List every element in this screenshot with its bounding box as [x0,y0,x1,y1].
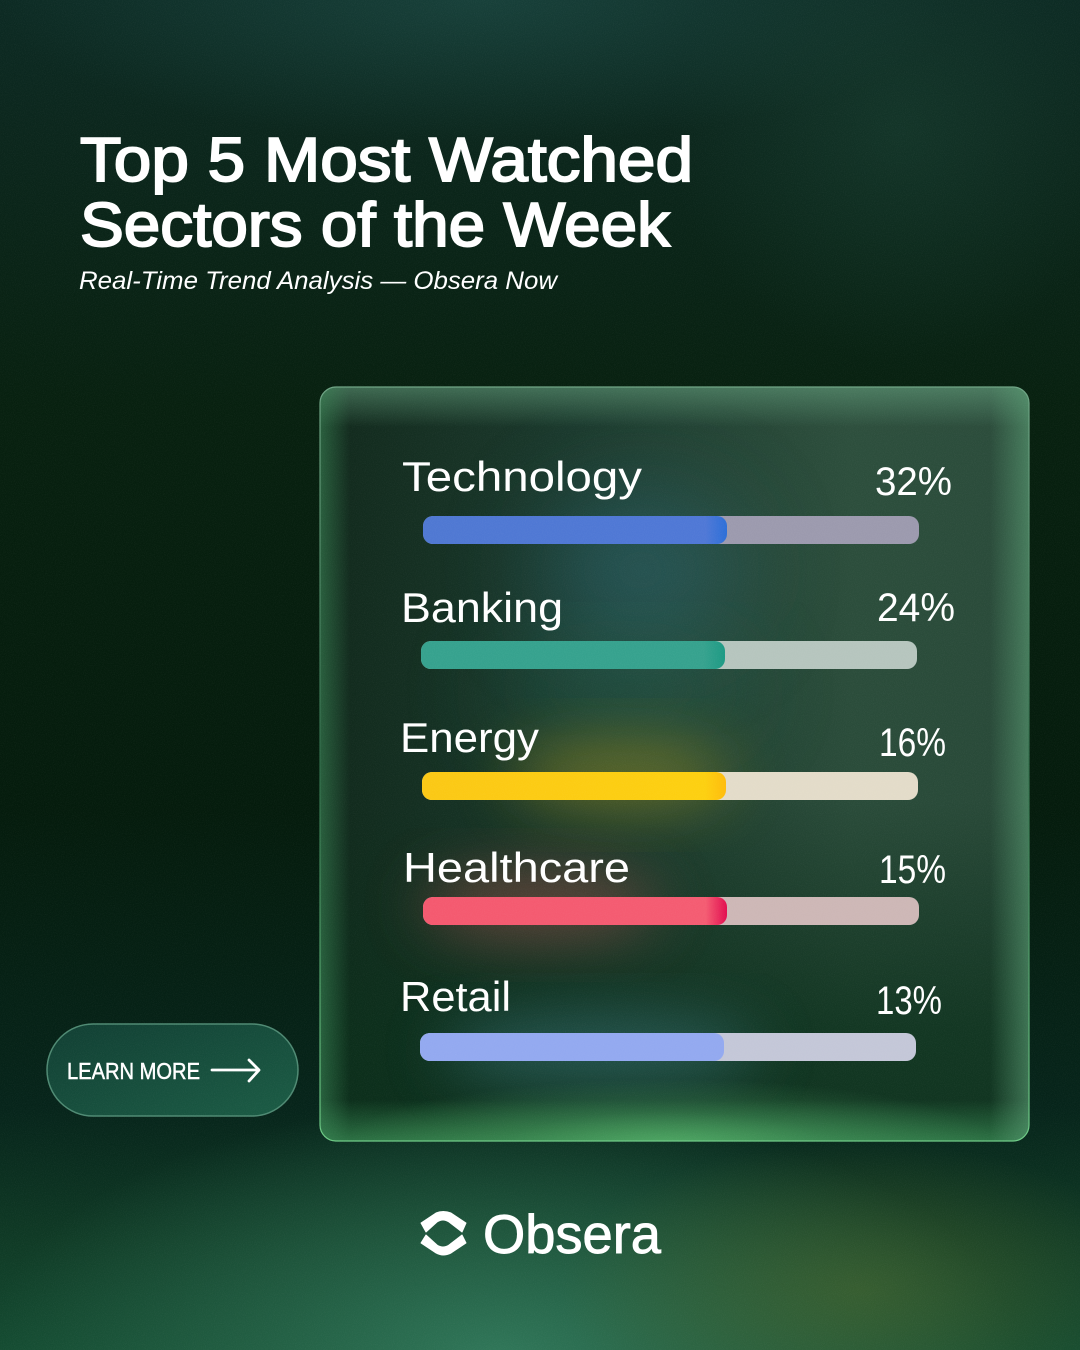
row: Healthcare 15%: 15% [879,848,946,892]
subtitle: Real-Time Trend Analysis — Obsera Now [79,267,559,295]
row: Technology 32%: Technology [402,453,642,500]
row: Energy 16% [400,714,946,800]
button: learn more [47,1024,298,1116]
panel glass background [320,387,1029,1141]
icon: chevrons [421,1212,466,1255]
row: Retail 13%: 13% [876,979,942,1023]
row: Technology 32%: 32% [875,460,952,504]
row: Retail 13% [400,973,942,1061]
row: Healthcare 15%: Healthcare [403,844,630,891]
panel: sector chart [320,387,1029,1141]
row: Banking 24% [401,584,955,669]
row: Banking 24%: Banking [401,584,563,631]
row: Energy 16%: Energy [400,714,539,761]
row: Retail 13%: Retail [400,973,511,1020]
title: Sectors of the Week [80,191,671,260]
title: Top 5 Most Watched [80,126,693,195]
row: Healthcare 15% [403,844,946,925]
logo: Obsera: Obsera [483,1203,661,1265]
button: learn more: LEARN MORE [67,1058,200,1084]
row: Technology 32% [402,453,952,544]
title [80,126,693,260]
icon: arrow [212,1060,259,1081]
row: Banking 24%: 24% [877,586,955,630]
row: Energy 16%: 16% [879,721,946,765]
